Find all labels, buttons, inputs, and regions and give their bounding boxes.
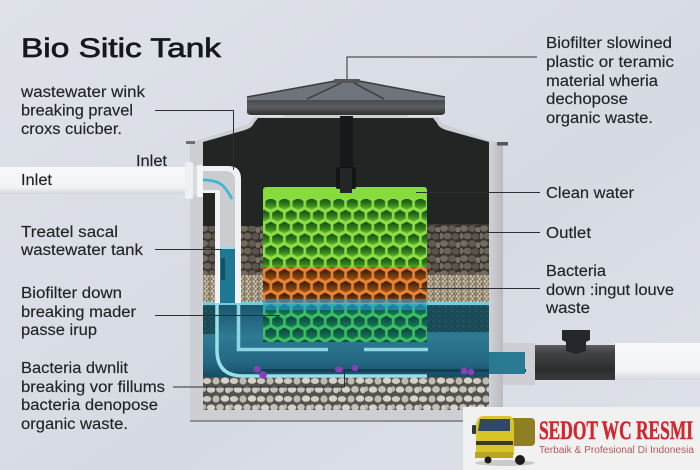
- right wall shading: [489, 143, 503, 421]
- brand tagline: Terbaik & Profesional Di Indonesia: [539, 445, 694, 456]
- label: bacteria left: breaking vor fillums: [21, 379, 165, 396]
- tank interior dark chamber: [203, 118, 489, 410]
- label: biofilter down: passe irup: [21, 322, 97, 339]
- water surface line: [203, 302, 489, 305]
- label: bacteria right: waste: [545, 300, 590, 317]
- label: biofilter down: [21, 285, 136, 339]
- purple bacteria: [254, 365, 474, 379]
- teal hex section: [263, 304, 427, 342]
- submerged gravel left: [203, 306, 215, 334]
- label: bacteria left: organic waste.: [21, 416, 128, 433]
- submerged gravel right: [427, 306, 489, 332]
- pipe water dark band: [221, 258, 225, 280]
- stem coupling inner: [340, 168, 352, 193]
- label: biofilter down: breaking mader: [21, 304, 136, 321]
- submerged pipe curve: [217, 303, 427, 376]
- label: bacteria right: down :ingut louve: [546, 282, 674, 299]
- outlet channel water: [489, 352, 525, 374]
- lid dome: [247, 81, 445, 101]
- label: treated tank: Treatel sacal: [21, 224, 118, 241]
- inlet flange: [185, 162, 193, 199]
- label: wastewater: wastewater wink: [20, 84, 145, 101]
- label: biofilter top right: organic waste.: [546, 110, 653, 127]
- pipe water column: [220, 248, 235, 303]
- inlet elbow interior: [203, 171, 235, 303]
- blue strip of media: [263, 299, 427, 310]
- label: biofilter top right: [546, 35, 674, 127]
- orange hex section: [263, 267, 427, 303]
- inlet elbow outer shell: [203, 166, 241, 303]
- label: bacteria left: Bacteria dwnlit: [21, 360, 129, 377]
- outlet pipe dark: [535, 345, 615, 380]
- tan gravel layer: [203, 275, 489, 303]
- banner background: [463, 407, 700, 470]
- label: treated tank: wastewater tank: [20, 242, 143, 259]
- label: bacteria left: [21, 360, 165, 433]
- title: Bio Sitic Tank: [21, 33, 222, 63]
- label: biofilter down: Biofilter down: [21, 285, 122, 302]
- label: biofilter top right: dechopose: [546, 91, 628, 108]
- label: wastewater: [20, 84, 145, 138]
- label: outlet: Outlet: [546, 225, 592, 242]
- biofilter media: [263, 187, 427, 342]
- green media top: [263, 187, 427, 199]
- lid underside highlight: [248, 115, 444, 117]
- label: bacteria right: Bacteria: [546, 263, 607, 280]
- central stem: [340, 116, 353, 188]
- label: clean water: Clean water: [546, 185, 634, 202]
- outlet collar: [562, 330, 590, 354]
- label: inlet upper: Inlet: [136, 153, 168, 170]
- tank bottom shadow: [190, 420, 490, 422]
- inner baffle: [238, 303, 428, 350]
- water body: [203, 303, 489, 378]
- label: bacteria right: [545, 263, 674, 317]
- inlet pipe: [0, 167, 187, 194]
- label: biofilter top right: plastic or teramic: [546, 54, 674, 71]
- dark gravel layer right: [427, 224, 489, 276]
- tank diagram: [0, 79, 700, 422]
- lid rim: [247, 100, 445, 115]
- lid ribs: [247, 81, 445, 99]
- lid cap: [334, 79, 360, 83]
- label: biofilter top right: Biofilter slowined: [546, 35, 672, 52]
- bottom pebbles: [203, 377, 489, 410]
- label: treated tank: [20, 224, 143, 259]
- stem coupling: [336, 167, 356, 189]
- dark water band: [262, 369, 526, 372]
- logo banner: [463, 407, 700, 470]
- label: bacteria left: bacteria denopose: [21, 397, 158, 414]
- inlet flow: [203, 180, 232, 199]
- label: biofilter top right: material wheria: [546, 73, 659, 90]
- label: wastewater: croxs cuicber.: [21, 121, 122, 138]
- tank shell: [190, 114, 535, 421]
- label: wastewater: breaking pravel: [21, 102, 133, 120]
- green hex section: [263, 197, 427, 267]
- label: inlet on pipe: Inlet: [21, 172, 53, 189]
- dark gravel layer left: [203, 226, 263, 276]
- icon: truck: [472, 416, 535, 466]
- wall stubs: [186, 141, 195, 144]
- outlet pipe white: [615, 343, 700, 380]
- pipe water top highlight: [220, 246, 235, 249]
- leader lines: [155, 57, 540, 387]
